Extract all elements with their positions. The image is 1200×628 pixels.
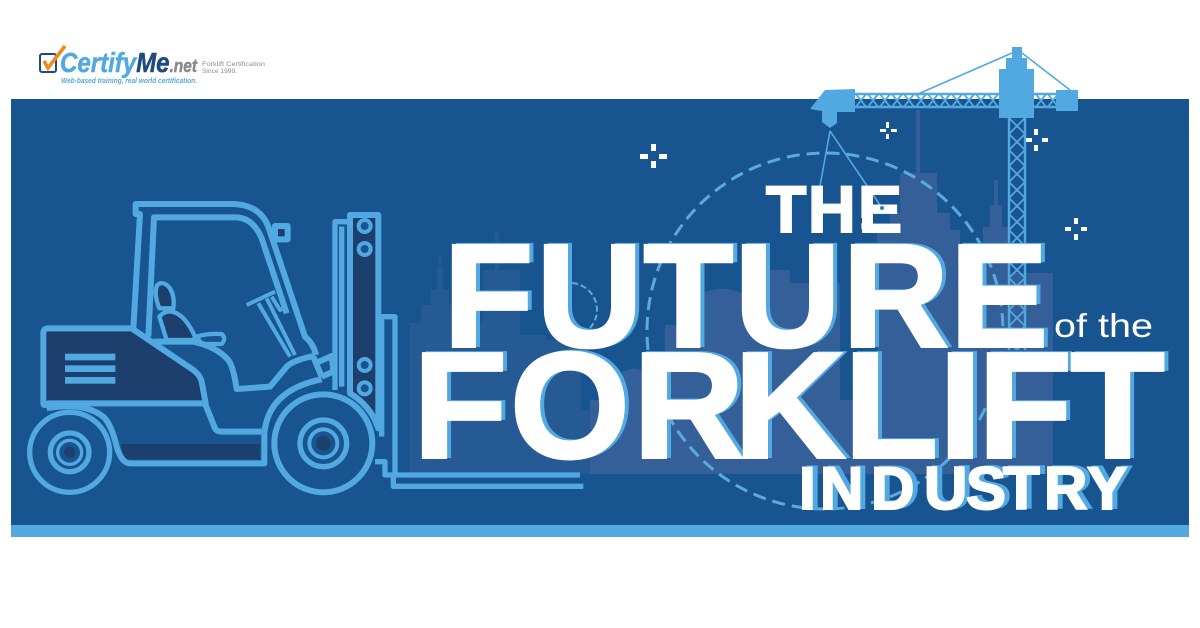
faint left buildings: [410, 232, 602, 474]
title shadow: INDUSTRY: INDUSTRY: [804, 454, 1132, 521]
chassis lower step: [205, 403, 262, 432]
crane mast: [1009, 118, 1025, 350]
central buildings: [590, 110, 1053, 474]
crane support cables: [918, 53, 1070, 94]
front wheel: [274, 394, 372, 492]
small dashed arc: [572, 283, 597, 328]
hook dot: [880, 206, 884, 210]
chassis skirt: [47, 406, 264, 463]
sparkle 2: [880, 122, 897, 139]
logo note: Forklift Certification: [202, 62, 265, 68]
title: of the: of the: [1054, 307, 1153, 344]
crane counterweight: [1056, 90, 1078, 111]
dashed circle: [647, 153, 1003, 509]
chassis skirt dark: [122, 444, 260, 459]
steering column: [247, 292, 295, 357]
forklift: [30, 204, 583, 492]
bottom accent strip: [11, 525, 1189, 537]
title: FORKLIFT: FORKLIFT: [413, 322, 1165, 490]
banner background: [11, 99, 1189, 537]
logo note line 2: Since 1999.: [202, 69, 237, 75]
mast back carriage: [382, 317, 395, 475]
title: INDUSTRY: INDUSTRY: [799, 455, 1127, 522]
logo wordmark: CertifyMe.net: [60, 47, 198, 78]
crane tower top: [999, 47, 1034, 118]
crane cabin: [810, 89, 855, 128]
crane: [810, 47, 1078, 350]
crane hook cables: [820, 131, 882, 208]
title shadow: FORKLIFT: FORKLIFT: [417, 321, 1169, 489]
rear wheel: [30, 412, 110, 492]
cab inner frame: [148, 217, 287, 337]
forks: [375, 462, 583, 486]
logo checkbox: [40, 46, 65, 72]
sparkles: [640, 122, 1087, 240]
title: FUTURE: FUTURE: [444, 214, 1048, 378]
engine body: [43, 328, 206, 405]
crane jib: [855, 93, 1061, 108]
mirror: [275, 226, 288, 239]
mast left rail: [335, 222, 352, 390]
mast column: [350, 215, 378, 428]
chassis floor line: [153, 342, 315, 389]
sparkle 3: [1026, 129, 1048, 151]
title: THE: THE: [766, 172, 902, 246]
city skyline: [410, 110, 1053, 474]
seat: [156, 283, 224, 344]
title shadow: FUTURE: FUTURE: [448, 214, 1052, 378]
sparkle 1: [640, 144, 667, 168]
engine vents: [65, 354, 115, 384]
cab frame: [133, 204, 316, 355]
logo tagline: Web-based training, real world certification.: [61, 78, 197, 85]
mast rollers: [359, 220, 371, 394]
sparkle 4: [1065, 218, 1087, 240]
front wheel arch: [264, 356, 333, 433]
sparkle over title: [853, 218, 862, 234]
logo: [40, 46, 265, 85]
